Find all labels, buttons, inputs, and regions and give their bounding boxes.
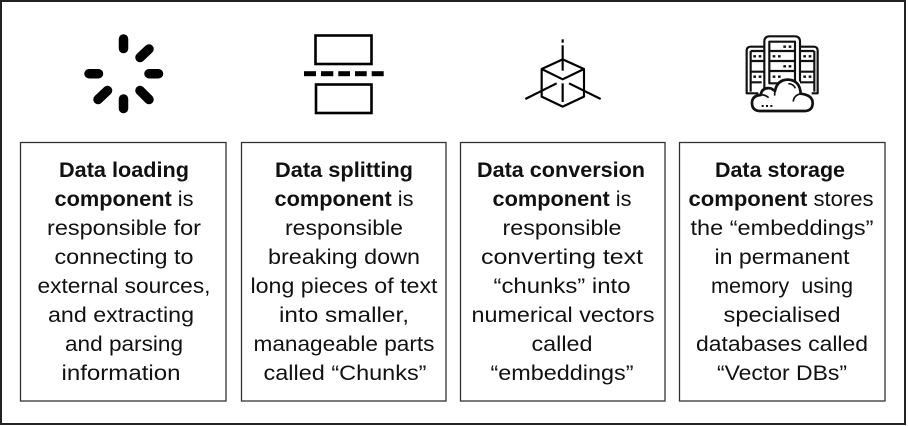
text: data conversion description: “chunks” into [494, 275, 630, 298]
text: data splitting description: component is [274, 188, 414, 211]
text: data conversion description: called [532, 333, 592, 356]
text: data loading description: component is [54, 188, 194, 211]
text: data loading description: external sources, [38, 275, 210, 298]
text: data splitting description: responsible [285, 217, 403, 240]
icon: loading spinner [89, 39, 158, 108]
icon: cube with axes [525, 39, 601, 107]
text: data loading description [38, 159, 210, 385]
icon: server racks with cloud [747, 36, 818, 111]
panel: data splitting [242, 142, 446, 401]
text: data conversion description: “embeddings” [490, 362, 634, 385]
icon: splitting [304, 36, 384, 113]
panel: data loading [20, 142, 226, 401]
text: data splitting description: breaking down [268, 246, 420, 269]
text: data storage description: databases called [696, 333, 868, 356]
panel: data conversion [460, 142, 665, 401]
text: data loading description: connecting to [54, 246, 194, 269]
text: data loading description: and extracting [48, 304, 194, 327]
text: data storage description: in permanent [714, 246, 850, 269]
text: data splitting description: called “Chunks” [264, 362, 426, 385]
text: data conversion description: Data conversion [477, 159, 645, 182]
text: data loading description: responsible for [47, 217, 201, 240]
text: data splitting description: long pieces of text [250, 275, 438, 298]
panel: data storage [680, 142, 885, 401]
text: data storage description [688, 159, 874, 385]
text: data conversion description: responsible [502, 217, 622, 240]
text: data storage description: memory using [711, 275, 853, 298]
text: data storage description: component stores [688, 188, 874, 211]
text: data storage description: “Vector DBs” [717, 362, 847, 385]
text: data storage description: Data storage [715, 159, 845, 182]
text: data loading description: and parsing [65, 333, 183, 356]
text: data conversion description: numerical vectors [472, 304, 654, 327]
text: data conversion description [472, 159, 654, 385]
text: data splitting description [250, 159, 438, 385]
text: data loading description: Data loading [59, 159, 189, 182]
text: data splitting description: into smaller, [279, 304, 409, 327]
text: data loading description: information [62, 362, 180, 385]
text: data splitting description: Data splitting [275, 159, 413, 182]
text: data conversion description: component is [492, 188, 632, 211]
text: data storage description: specialised [724, 304, 840, 327]
text: data conversion description: converting text [481, 246, 643, 269]
text: data storage description: the “embeddings” [690, 217, 874, 240]
text: data splitting description: manageable parts [254, 333, 434, 356]
